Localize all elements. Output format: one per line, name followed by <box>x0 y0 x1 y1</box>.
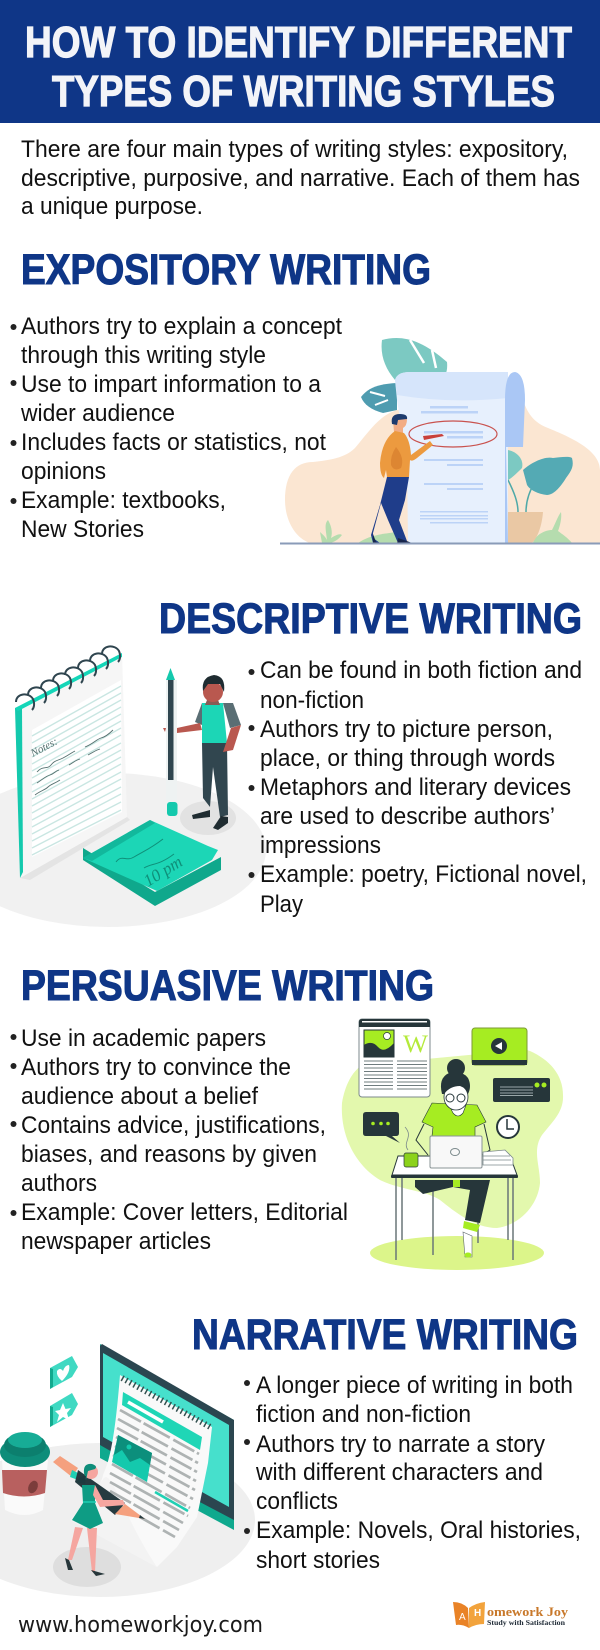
text block: narrative bullets: A longer piece of writing in both <box>256 1372 573 1399</box>
text block: narrative bullets: with different characters and <box>255 1459 543 1486</box>
logo: Homework Joy <box>453 1602 569 1628</box>
text block: expository bullets: New Stories <box>21 516 144 543</box>
text block: descriptive bullets: Can be found in both fiction and <box>260 657 582 684</box>
text block: persuasive bullets: biases, and reasons by given <box>21 1141 317 1168</box>
text block: descriptive bullets: impressions <box>260 832 381 859</box>
intro text: descriptive, purposive, and narrative. Each of them has <box>21 165 580 192</box>
text block: expository bullets: Includes facts or statistics, not <box>21 429 326 456</box>
text block: expository bullets: through this writing style <box>21 342 266 369</box>
illustration: woman working at a laptop: W <box>403 1031 428 1058</box>
text block: expository bullets: opinions <box>21 458 106 485</box>
text block: descriptive bullets: non-fiction <box>260 687 364 714</box>
text block: expository bullets: Use to impart information to a <box>21 371 322 398</box>
logo: Homework Joy: omework Joy <box>487 1604 569 1619</box>
text block: descriptive bullets: Example: poetry, Fictional novel, <box>260 861 587 888</box>
text block: descriptive bullets: Play <box>260 891 303 918</box>
intro text: a unique purpose. <box>21 193 203 220</box>
text block: persuasive bullets: audience about a belief <box>21 1083 258 1110</box>
text block: narrative bullets: short stories <box>256 1547 380 1574</box>
text block: narrative bullets: Authors try to narrate a story <box>256 1431 545 1458</box>
text block: descriptive bullets: place, or thing through words <box>260 745 555 772</box>
text block: descriptive bullets: Metaphors and literary devices <box>260 774 571 801</box>
text block: persuasive bullets: Authors try to convince the <box>21 1054 291 1081</box>
text block: narrative bullets: conflicts <box>256 1488 338 1515</box>
text block: descriptive bullets <box>248 657 587 918</box>
text block: persuasive bullets <box>10 1025 348 1255</box>
illustration: notepad, pencil and student: Notes: <box>28 736 60 760</box>
text block: persuasive bullets: Example: Cover letters, Editorial <box>21 1199 348 1226</box>
title banner <box>0 0 600 123</box>
illustration: notepad, pencil and student <box>0 646 266 927</box>
logo: Homework Joy: A <box>459 1612 466 1623</box>
text block: narrative bullets <box>244 1372 581 1574</box>
illustration: man marking a paper scroll <box>280 338 600 544</box>
text block: expository bullets: Example: textbooks, <box>21 487 226 514</box>
text block: persuasive bullets: Use in academic papers <box>21 1025 266 1052</box>
website url: www.homeworkjoy.com <box>18 1613 263 1638</box>
intro text: There are four main types of writing styles: expository, <box>21 136 568 163</box>
text block: expository bullets: wider audience <box>20 400 175 427</box>
heading: expository writing: EXPOSITORY WRITING <box>21 246 431 294</box>
illustration: woman working at a laptop <box>342 1019 563 1270</box>
text block: narrative bullets: fiction and non-fiction <box>256 1401 471 1428</box>
text block: descriptive bullets: Authors try to picture person, <box>260 716 553 743</box>
illustration: notepad, pencil and student: 10 pm <box>140 852 186 890</box>
text block: narrative bullets: Example: Novels, Oral histories, <box>256 1517 581 1544</box>
logo: Homework Joy: Study with Satisfaction <box>487 1619 565 1627</box>
text block: persuasive bullets: newspaper articles <box>21 1228 211 1255</box>
text block: persuasive bullets: authors <box>21 1170 97 1197</box>
illustration: woman with pencil writing on a giant page <box>0 1344 255 1597</box>
heading: persuasive writing: PERSUASIVE WRITING <box>21 962 434 1010</box>
text block: expository bullets: Authors try to explain a concept <box>21 313 342 340</box>
intro text <box>21 136 580 220</box>
text block: descriptive bullets: are used to describe authors’ <box>260 803 555 830</box>
text block: expository bullets <box>10 313 342 543</box>
logo: Homework Joy: H <box>474 1608 481 1619</box>
text block: persuasive bullets: Contains advice, justifications, <box>21 1112 326 1139</box>
